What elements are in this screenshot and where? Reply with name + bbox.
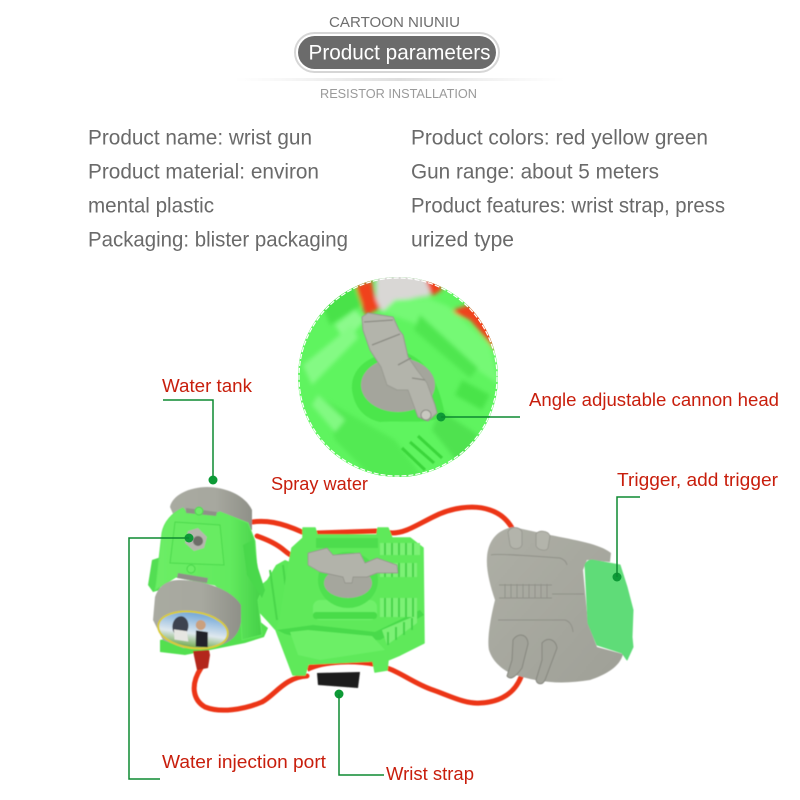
background top <box>372 270 505 330</box>
base tab <box>160 620 268 655</box>
magnified lens: cannon head <box>298 270 505 480</box>
barrel: lower <box>313 600 377 620</box>
title pill: Product parameters <box>308 40 490 64</box>
sleeve window <box>170 522 224 565</box>
parameters left column: Product material: environ <box>88 160 319 184</box>
callout: water injection port <box>129 534 326 779</box>
callout: wrist strap <box>334 690 474 784</box>
barrel: top <box>316 538 378 548</box>
sub heading: RESISTOR INSTALLATION <box>320 87 477 101</box>
callout: angle adjustable cannon head: Angle adjustable cannon head <box>529 389 779 410</box>
callout: spray water: Spray water <box>271 473 368 494</box>
red tube pieces <box>356 280 380 316</box>
side clip <box>243 540 265 598</box>
product <box>148 487 633 710</box>
cannon pedestal <box>352 352 445 422</box>
side lug <box>148 556 164 592</box>
lens dashed outline <box>299 278 497 476</box>
parameters right column: urized type <box>411 228 514 252</box>
water tank <box>148 487 268 670</box>
handle <box>487 527 633 684</box>
parameters right column: Product colors: red yellow green <box>411 126 708 150</box>
parameters left column: Product name: wrist gun <box>88 126 312 150</box>
parameters right column <box>411 126 725 252</box>
callout: water tank: Water tank <box>162 375 253 396</box>
cannon barrel <box>362 313 437 421</box>
bottom cylinder <box>153 580 241 648</box>
socket <box>185 528 207 551</box>
main green plate <box>276 528 424 675</box>
callout: wrist strap: Wrist strap <box>386 763 474 784</box>
top cylinder <box>170 487 252 530</box>
title pill <box>295 33 499 72</box>
parameters left column <box>88 126 348 252</box>
red tubes <box>194 507 521 710</box>
parameters left column: mental plastic <box>88 194 214 218</box>
parameters right column: Product features: wrist strap, press <box>411 194 725 218</box>
gun mount <box>318 552 378 608</box>
tube under plate <box>307 661 376 669</box>
connector arm <box>255 560 315 630</box>
header <box>235 15 565 101</box>
parameters left column: Packaging: blister packaging <box>88 228 348 252</box>
handle knobs <box>508 528 550 550</box>
green sleeve <box>155 508 262 640</box>
callout: water tank <box>162 375 253 484</box>
small cannon <box>308 548 398 583</box>
filler nozzle <box>193 650 210 670</box>
upper green body <box>382 298 500 385</box>
callout: angle adjustable cannon head <box>436 389 779 422</box>
brand heading: CARTOON NIUNIU <box>329 15 460 31</box>
handle body <box>487 527 623 682</box>
cartoon label <box>156 607 230 653</box>
trigger <box>585 560 633 660</box>
callout: trigger: Trigger, add trigger <box>617 469 778 490</box>
clamp slots <box>177 508 217 583</box>
callout: water injection port: Water injection port <box>162 751 326 772</box>
wrist strap piece <box>317 672 360 688</box>
callout: trigger <box>612 469 778 582</box>
parameters right column: Gun range: about 5 meters <box>411 160 659 184</box>
